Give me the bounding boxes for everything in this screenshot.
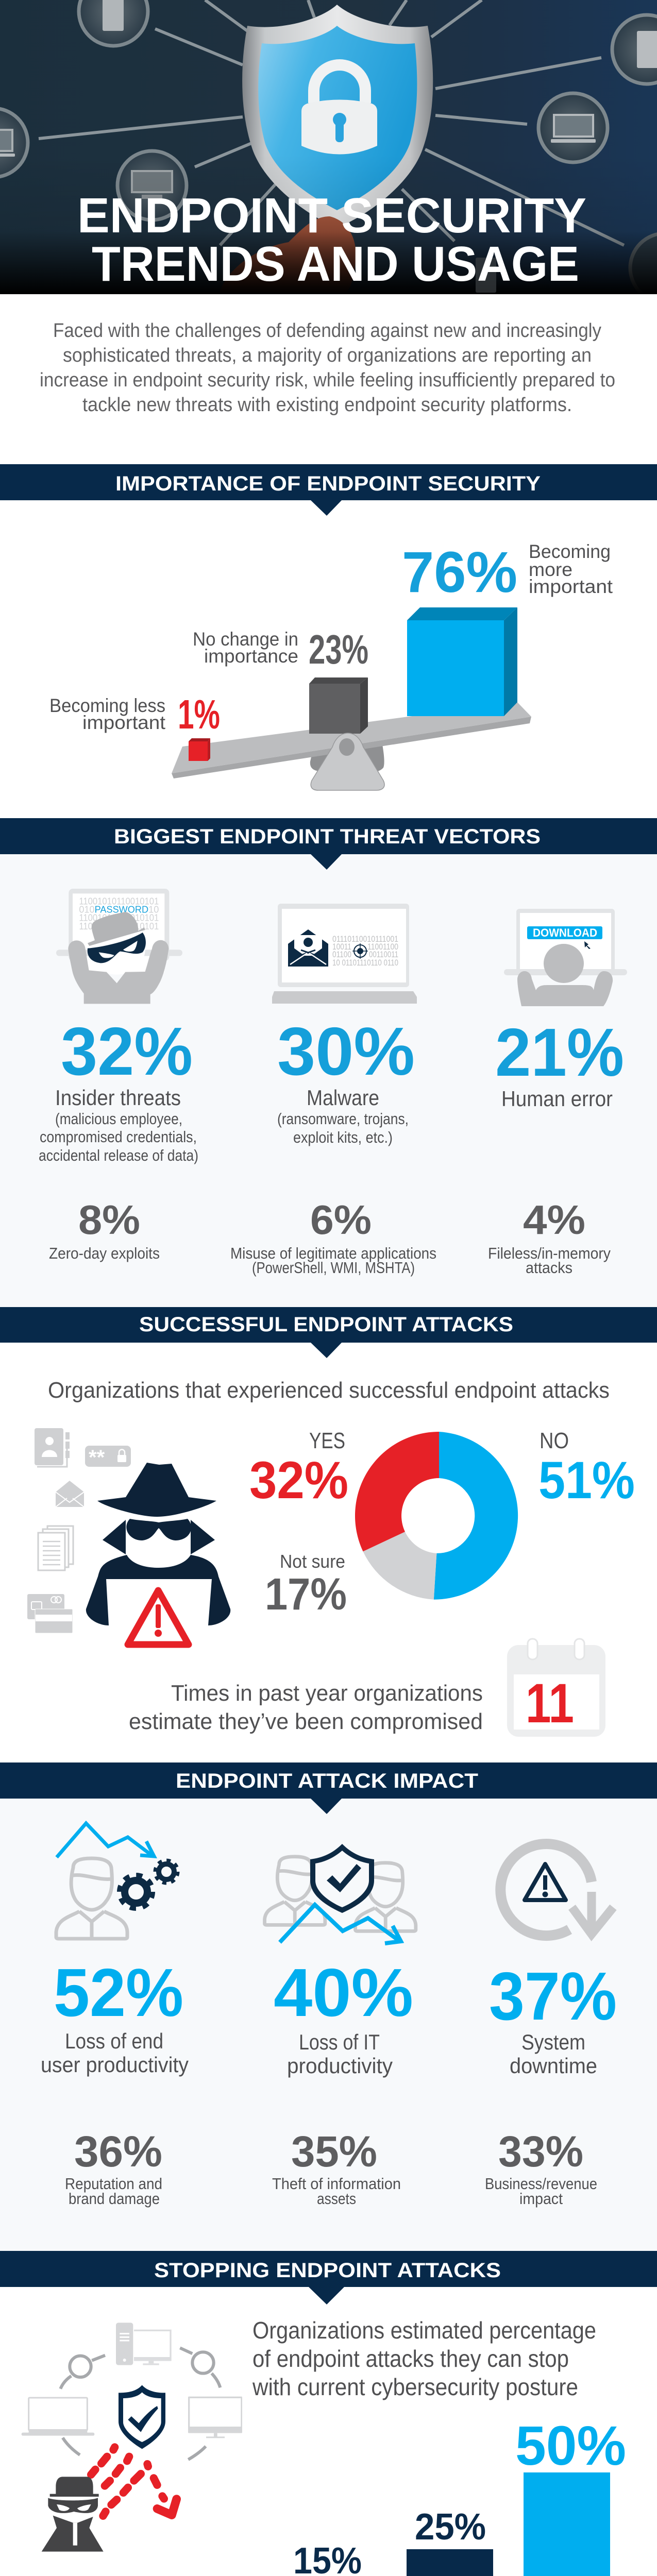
stat: misuse of legitimate applications: (PowerShell, WMI, MSHTA) [252, 1259, 415, 1277]
intro text: increase in endpoint security risk, while feeling insufficiently prepared to [40, 369, 615, 391]
bar: more than 75 percent [515, 2414, 626, 2576]
callout text [129, 1681, 483, 1734]
icon: documents [38, 1526, 73, 1570]
stat: insider threats: (malicious employee, [55, 1110, 182, 1128]
stat 23 percent [193, 626, 368, 672]
icon: attack on protected endpoints [22, 2323, 242, 2552]
stat: malware [277, 1013, 415, 1146]
label: yes: YES [309, 1428, 345, 1453]
red block 1 percent [189, 738, 210, 761]
intro text: Faced with the challenges of defending against new and increasingly [53, 320, 601, 342]
icon: laptop node left [0, 108, 28, 177]
label: no: 51% [538, 1451, 635, 1510]
download button: DOWNLOAD [533, 926, 597, 939]
stat: reputation and brand damage: brand damage [69, 2190, 160, 2208]
icon: malware on laptop: 00110011 [369, 950, 398, 959]
icon: phone fading at bottom [476, 258, 496, 293]
label: not sure [265, 1551, 347, 1619]
icon: padlock [301, 65, 377, 155]
bar chart [54, 2414, 626, 2576]
label: yes [249, 1428, 348, 1510]
section: endpoint attack impact [0, 1762, 657, 2251]
beam [172, 717, 531, 778]
stat: insider threats: 32% [61, 1013, 193, 1089]
stat: loss of IT productivity: Loss of IT [299, 2030, 380, 2054]
stat: theft of information assets [272, 2127, 401, 2208]
stat: business revenue impact: impact [519, 2190, 563, 2208]
icon: system downtime [500, 1844, 613, 1936]
section: biggest endpoint threat vectors [0, 818, 657, 1308]
donut chart [355, 1432, 518, 1600]
stat: reputation and brand damage: 36% [74, 2127, 162, 2176]
heading band [0, 1307, 657, 1358]
stat: misuse of legitimate applications: Misuse of legitimate applications [230, 1244, 436, 1262]
icon: faded node bottom right [629, 232, 657, 285]
icon: user productivity decline [56, 1823, 178, 1939]
stat 76 percent: important [529, 576, 613, 597]
icon: address book [35, 1428, 70, 1467]
icon: malware on laptop: 10 01101110110 0110 [332, 958, 398, 968]
stat: loss of IT productivity: productivity [287, 2054, 393, 2078]
icon: envelope [56, 1481, 84, 1507]
title: TRENDS AND USAGE [92, 236, 579, 292]
icon: credit cards [27, 1594, 73, 1633]
icon: human error at laptop [504, 909, 627, 1006]
stat: insider threats [39, 1013, 198, 1164]
stat 23 percent: No change in [193, 629, 298, 650]
stat: loss of IT productivity: 40% [274, 1955, 413, 2030]
icon: IT productivity decline [265, 1844, 416, 1943]
heading band [0, 2251, 657, 2304]
callout text: Times in past year organizations [171, 1681, 483, 1706]
icon: insider at laptop: 010PASSWORD10 [79, 904, 159, 915]
icon: malware on laptop: 01110110010111001 [332, 934, 398, 944]
stat: malware: Malware [307, 1086, 379, 1110]
bar: more than 75 percent: 50% [515, 2414, 626, 2477]
stat: loss of end user productivity [41, 1955, 189, 2077]
icon: calendar [507, 1639, 605, 1737]
heading band: SUCCESSFUL ENDPOINT ATTACKS [139, 1313, 513, 1336]
stat 1 percent [49, 691, 220, 737]
intro text [252, 2317, 596, 2400]
label: yes: 32% [249, 1451, 348, 1510]
stat 23 percent: importance [204, 646, 298, 667]
fulcrum back legs [310, 744, 384, 772]
stat: zero-day exploits: 8% [78, 1197, 140, 1243]
stat: business revenue impact: 33% [498, 2127, 583, 2176]
gray block 23 percent [309, 677, 368, 734]
stat: business revenue impact [485, 2127, 597, 2208]
heading band [0, 1762, 657, 1814]
stat: fileless attacks: 4% [523, 1197, 585, 1243]
bar: 51-75 percent: 25% [415, 2506, 486, 2548]
stat: system downtime: System [521, 2030, 585, 2054]
stat: misuse of legitimate applications [230, 1197, 436, 1277]
stat 76 percent: more [529, 559, 572, 580]
stat 1 percent: 1% [178, 691, 220, 737]
stat: insider threats: compromised credentials, [40, 1128, 197, 1146]
stat 76 percent [402, 540, 613, 604]
intro text: with current cybersecurity posture [252, 2374, 578, 2400]
stat: theft of information assets: assets [317, 2190, 356, 2208]
heading band: BIGGEST ENDPOINT THREAT VECTORS [114, 825, 541, 848]
stat: fileless attacks: Fileless/in-memory [488, 1244, 611, 1262]
heading band [0, 818, 657, 870]
stat 1 percent: Becoming less [49, 695, 165, 716]
intro text: tackle new threats with existing endpoint security platforms. [82, 394, 572, 416]
icon: password field [85, 1446, 131, 1469]
hero banner [0, 0, 657, 302]
heading band: STOPPING ENDPOINT ATTACKS [154, 2259, 501, 2282]
stat 23 percent: 23% [309, 626, 368, 672]
icon: phone node [79, 0, 148, 46]
stat 76 percent: Becoming [529, 541, 611, 562]
stat: system downtime: downtime [510, 2054, 597, 2078]
stat: system downtime [489, 1958, 617, 2078]
stat: reputation and brand damage [65, 2127, 162, 2208]
icon: insider at laptop: 11001010110010101 [79, 896, 159, 907]
section: importance of endpoint security [0, 464, 657, 790]
heading band: ENDPOINT ATTACK IMPACT [176, 1770, 478, 1792]
stat: fileless attacks: attacks [526, 1259, 572, 1277]
stat: malware: 30% [277, 1013, 415, 1089]
blue block 76 percent [407, 607, 517, 716]
stat: malware: (ransomware, trojans, [277, 1110, 409, 1128]
label: no [538, 1428, 635, 1510]
section: successful endpoint attacks [0, 1307, 657, 1737]
heading band [0, 464, 657, 516]
subheading: Organizations that experienced successful endpoint attacks [48, 1378, 610, 1403]
stat: misuse of legitimate applications: 6% [310, 1197, 372, 1243]
bar: 51-75 percent [407, 2506, 493, 2576]
stat: insider threats: accidental release of data) [39, 1146, 198, 1164]
bug target [352, 943, 368, 959]
icon: calendar: 11 [526, 1672, 574, 1734]
stat: business revenue impact: Business/revenue [485, 2175, 597, 2193]
icon: malware on laptop: 10011 [332, 942, 351, 952]
scale graphic [172, 607, 531, 790]
fingertip [223, 216, 356, 286]
icon: hacker at laptop [86, 1463, 230, 1645]
stat: loss of end user productivity: 52% [54, 1955, 183, 2030]
stat: system downtime: 37% [489, 1958, 617, 2034]
intro text: Organizations estimated percentage [252, 2317, 596, 2344]
icon: laptop node right [538, 93, 608, 162]
fulcrum [311, 733, 384, 790]
stat: malware: exploit kits, etc.) [293, 1128, 393, 1146]
stat: theft of information assets: 35% [291, 2127, 377, 2176]
stat 1 percent: important [82, 712, 166, 733]
icon: insider at laptop [56, 889, 182, 1004]
icon: monitor node [117, 151, 187, 220]
intro text [40, 320, 615, 416]
callout text: estimate they’ve been compromised [129, 1709, 483, 1734]
stat: zero-day exploits [49, 1197, 160, 1262]
stat: loss of end user productivity: user productivity [41, 2053, 189, 2077]
stat 76 percent: 76% [402, 540, 517, 604]
icon: malware on laptop: 01100 [332, 950, 351, 959]
icon: malware on laptop: 11001100 [367, 942, 398, 952]
envelope with skull [288, 929, 328, 967]
stat: fileless attacks [488, 1197, 611, 1277]
label: not sure: Not sure [280, 1551, 345, 1572]
stat: insider threats: Insider threats [55, 1086, 181, 1110]
title [80, 198, 585, 281]
icon: shield [242, 5, 433, 228]
heading band: IMPORTANCE OF ENDPOINT SECURITY [115, 472, 541, 495]
label: not sure: 17% [265, 1569, 347, 1619]
warning triangle [128, 1590, 189, 1645]
stat: loss of end user productivity: Loss of end [65, 2029, 163, 2053]
section: stopping endpoint attacks [0, 2251, 657, 2576]
icon: password field: ** [89, 1446, 105, 1469]
stat: zero-day exploits: Zero-day exploits [49, 1244, 160, 1262]
stat: reputation and brand damage: Reputation and [65, 2175, 162, 2193]
stat: loss of IT productivity [274, 1955, 413, 2078]
intro text: of endpoint attacks they can stop [252, 2345, 569, 2372]
icon: malware on laptop [272, 904, 417, 1004]
icon: insider at laptop: 11001010110010101 [79, 921, 159, 931]
label: no: NO [540, 1428, 569, 1453]
stat: human error: Human error [501, 1087, 613, 1111]
stat: theft of information assets: Theft of information [272, 2175, 401, 2193]
stat: human error: 21% [495, 1014, 624, 1090]
icon: tablet node [612, 15, 657, 84]
title: ENDPOINT SECURITY [77, 188, 586, 243]
intro text: sophisticated threats, a majority of organizations are reporting an [63, 345, 592, 366]
icon: insider at laptop: 11001010110010101 [79, 912, 159, 923]
